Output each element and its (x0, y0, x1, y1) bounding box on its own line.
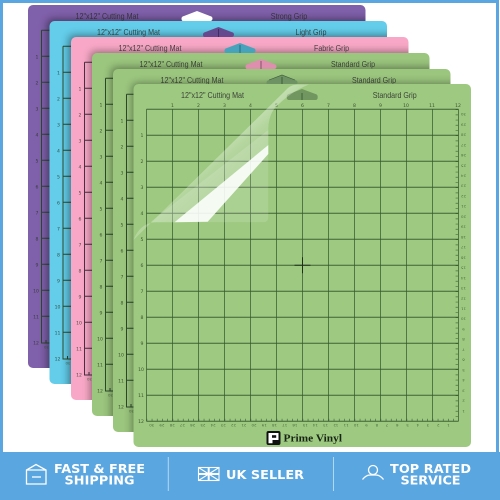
pink ruler numbers: 7 (79, 242, 82, 248)
right cm numbers: 29 (461, 122, 466, 127)
pink ruler numbers: 10 (76, 320, 82, 326)
left inch numbers: 6 (141, 263, 144, 269)
mat: purple strong grip (28, 5, 366, 368)
film white reflection (174, 145, 268, 222)
bottom cm numbers: 10 (353, 423, 359, 428)
mat: green standard grip front (134, 84, 471, 447)
UK seller text: UK SELLER (226, 468, 304, 483)
right cm numbers: 11 (461, 306, 466, 312)
pink ruler numbers: 8 (79, 268, 82, 274)
green middle ruler numbers: 2 (121, 144, 124, 150)
green back ruler numbers: 10 (97, 336, 103, 342)
blue ruler numbers: 6 (57, 200, 60, 206)
bottom cm numbers: 23 (220, 423, 226, 428)
pink ruler numbers: 6 (79, 216, 82, 222)
green back ruler numbers: 2 (100, 128, 103, 134)
bottom cm numbers: 27 (179, 423, 185, 428)
purple ruler numbers: 6 (36, 184, 39, 190)
right cm numbers: 27 (461, 143, 466, 148)
purple ruler numbers (33, 54, 49, 350)
blue ruler numbers: 30 (65, 361, 70, 366)
peeled film flap (134, 84, 309, 240)
front grip label: Standard Grip (373, 90, 417, 100)
purple ruler numbers: 2 (36, 80, 39, 86)
top inch numbers: 10 (403, 103, 409, 109)
purple ruler numbers: 12 (33, 340, 39, 346)
footer band (0, 452, 500, 500)
icon: shipping box (26, 464, 46, 484)
green middle ruler numbers: 4 (121, 196, 124, 202)
green middle ruler numbers: 11 (118, 378, 124, 384)
blue mat handle hole (203, 27, 234, 37)
purple ruler numbers: 9 (36, 262, 39, 268)
left inch numbers: 11 (138, 393, 144, 399)
fast and free shipping text: SHIPPING (64, 474, 134, 488)
top inch numbers: 9 (379, 103, 382, 109)
front handle hole (287, 89, 318, 100)
blue ruler numbers: 5 (57, 174, 60, 180)
left inch numbers: 9 (141, 341, 144, 347)
purple heading: 12"x12" Cutting Mat (76, 11, 139, 21)
bottom cm numbers: 13 (323, 423, 328, 428)
top inch numbers: 7 (327, 103, 330, 109)
pink ruler numbers: 4 (79, 164, 82, 170)
pink ruler numbers: 2 (79, 112, 82, 118)
top inch numbers: 11 (429, 103, 435, 109)
green back ruler numbers: 4 (100, 180, 103, 186)
purple ruler numbers: 8 (36, 236, 39, 242)
blue ruler numbers (55, 70, 70, 366)
bottom cm numbers: 16 (292, 423, 297, 428)
bottom cm numbers: 2 (436, 423, 439, 428)
blue ruler numbers: 12 (55, 356, 60, 362)
right cm numbers: 28 (461, 133, 466, 138)
pink ruler numbers (76, 86, 92, 382)
green middle ruler numbers: 6 (121, 248, 124, 254)
pink ruler numbers: 5 (79, 190, 82, 196)
top inch numbers: 5 (275, 103, 278, 109)
right cm numbers: 26 (461, 153, 466, 158)
icon: person (362, 466, 384, 480)
green back ruler numbers: 30 (108, 393, 113, 398)
front heading: 12"x12" Cutting Mat (181, 90, 245, 100)
blue grip label: Light Grip (296, 27, 327, 37)
bottom cm numbers: 28 (169, 423, 175, 428)
right cm numbers: 14 (461, 276, 466, 281)
green middle ruler numbers: 8 (121, 300, 124, 306)
right cm numbers: 19 (461, 225, 466, 230)
bottom cm numbers: 3 (426, 423, 429, 428)
bottom cm numbers: 8 (375, 423, 378, 428)
brand logo (266, 431, 342, 445)
right cm numbers: 7 (462, 347, 465, 352)
top rated service text: SERVICE (400, 474, 460, 488)
pink ruler numbers: 9 (79, 294, 82, 300)
logo mark (266, 431, 280, 445)
pink grip label: Fabric Grip (314, 43, 349, 53)
blue heading: 12"x12" Cutting Mat (97, 27, 161, 37)
green back ruler numbers: 5 (100, 206, 103, 212)
bottom cm numbers: 17 (282, 423, 287, 428)
fast and free shipping text (54, 462, 145, 488)
bottom cm numbers: 12 (333, 423, 338, 428)
green middle ruler numbers: 5 (121, 222, 124, 228)
bottom cm numbers: 22 (231, 423, 236, 428)
purple ruler numbers: 7 (36, 210, 39, 216)
green back ruler numbers: 1 (100, 102, 103, 108)
green back ruler numbers: 3 (100, 154, 103, 160)
cutting grid (146, 109, 458, 421)
dividers (168, 457, 334, 491)
blue ruler numbers: 2 (57, 96, 60, 102)
top inch numbers: 6 (301, 103, 304, 109)
mat: green standard grip middle (113, 69, 450, 432)
top inch numbers: 1 (171, 103, 174, 109)
bottom cm numbers: 1 (447, 423, 450, 428)
left inch numbers: 5 (141, 237, 144, 243)
green back ruler numbers: 6 (100, 232, 103, 238)
purple ruler numbers: 3 (36, 106, 39, 112)
right cm numbers: 15 (461, 266, 466, 271)
blue ruler numbers: 3 (57, 122, 60, 128)
pink mat handle hole (224, 43, 256, 53)
right cm numbers: 24 (461, 174, 466, 178)
bottom cm numbers: 6 (395, 423, 398, 428)
left inch numbers: 8 (141, 315, 144, 321)
right cm numbers: 22 (461, 194, 466, 199)
green back ruler numbers: 12 (97, 388, 103, 394)
right cm numbers: 30 (461, 112, 466, 117)
bottom cm numbers: 14 (312, 423, 318, 428)
purple ruler numbers: 5 (36, 158, 39, 164)
right cm numbers: 25 (461, 163, 466, 168)
pink ruler numbers: 1 (79, 86, 82, 92)
bottom cm numbers: 21 (241, 423, 246, 428)
purple ruler numbers: 4 (36, 132, 39, 138)
right cm numbers: 13 (461, 286, 466, 291)
bottom cm numbers: 18 (272, 423, 277, 428)
top inch numbers: 12 (455, 103, 461, 109)
blue ruler numbers: 8 (57, 252, 60, 258)
bottom cm numbers: 20 (251, 423, 256, 428)
green middle ruler numbers: 30 (129, 409, 134, 414)
left inch numbers: 4 (141, 211, 144, 217)
bottom cm numbers: 4 (416, 423, 419, 428)
green middle ruler numbers: 9 (121, 326, 124, 332)
right cm numbers: 16 (461, 255, 466, 260)
pink ruler numbers: 11 (76, 346, 82, 352)
bottom cm numbers: 25 (200, 423, 205, 428)
left inch numbers: 1 (141, 133, 144, 139)
right cm numbers: 18 (461, 235, 466, 240)
bottom cm numbers: 24 (210, 423, 216, 428)
top inch numbers: 8 (353, 103, 356, 109)
blue ruler numbers: 7 (57, 226, 60, 232)
green middle handle hole (266, 75, 298, 85)
logo wordmark: Prime Vinyl (284, 434, 342, 444)
green middle ruler numbers: 1 (121, 118, 124, 124)
right cm numbers: 21 (461, 204, 466, 209)
blue ruler numbers: 9 (57, 278, 60, 284)
purple ruler numbers: 11 (33, 314, 39, 320)
bottom cm numbers: 26 (190, 423, 195, 428)
left inch numbers: 12 (138, 419, 144, 425)
green middle ruler numbers: 10 (118, 352, 124, 358)
green middle grip label: Standard Grip (352, 75, 396, 85)
center crosshair (294, 257, 310, 273)
mat: blue light grip (50, 21, 387, 384)
green middle heading: 12"x12" Cutting Mat (160, 75, 224, 85)
right cm numbers: 1 (462, 409, 465, 414)
purple ruler numbers: 1 (36, 54, 39, 60)
right cm numbers: 17 (461, 245, 466, 250)
bottom cm numbers (149, 423, 450, 428)
left inch numbers: 2 (141, 159, 144, 165)
bottom cm numbers: 5 (406, 423, 409, 428)
bottom cm numbers: 30 (149, 423, 154, 428)
blue ruler numbers: 4 (57, 148, 60, 154)
green back ruler numbers: 11 (97, 362, 103, 368)
green back heading: 12"x12" Cutting Mat (140, 59, 203, 69)
left inch numbers: 3 (141, 185, 144, 191)
right cm numbers: 9 (462, 327, 465, 332)
pink ruler numbers: 3 (79, 138, 82, 144)
top inch numbers: 4 (249, 103, 252, 109)
right cm numbers: 2 (462, 399, 465, 404)
purple ruler numbers: 10 (33, 288, 39, 294)
green back ruler numbers: 7 (100, 258, 103, 264)
top rated service text (390, 462, 471, 488)
top rated service text: TOP RATED (390, 462, 471, 477)
right cm numbers: 23 (461, 184, 466, 189)
left inch numbers: 7 (141, 289, 144, 295)
bottom cm numbers: 19 (261, 423, 267, 428)
right cm numbers: 5 (462, 368, 465, 373)
fast and free shipping text: FAST & FREE (54, 462, 145, 477)
green middle ruler numbers (118, 118, 134, 414)
right cm numbers: 6 (462, 358, 465, 363)
left inch numbers (138, 133, 144, 425)
right cm numbers: 12 (461, 296, 466, 301)
green back ruler numbers: 8 (100, 284, 103, 290)
mat: green standard grip back (92, 53, 430, 416)
bottom cm numbers: 7 (385, 423, 388, 428)
bottom cm numbers: 29 (159, 423, 164, 428)
blue ruler numbers: 1 (57, 70, 60, 76)
purple grip label: Strong Grip (271, 11, 308, 21)
icon: UK flag (198, 468, 219, 480)
purple mat handle hole (182, 11, 212, 21)
pink ruler numbers: 12 (76, 372, 82, 378)
right cm numbers: 20 (461, 214, 466, 219)
right cm numbers: 10 (461, 317, 466, 322)
pink ruler numbers: 30 (87, 377, 92, 382)
cm ruler ticks (146, 109, 458, 421)
transparent film lower sheet (150, 130, 268, 222)
green middle ruler numbers: 7 (121, 274, 124, 280)
right cm numbers (461, 112, 466, 414)
purple ruler numbers: 30 (44, 345, 49, 350)
green back ruler numbers (97, 102, 113, 398)
green middle ruler numbers: 3 (121, 170, 124, 176)
green middle ruler numbers: 12 (118, 404, 124, 410)
top inch numbers: 3 (223, 103, 226, 109)
bottom cm numbers: 11 (343, 423, 349, 428)
green back ruler numbers: 9 (100, 310, 103, 316)
right cm numbers: 8 (462, 337, 465, 342)
pink heading: 12"x12" Cutting Mat (118, 43, 182, 53)
blue ruler numbers: 11 (55, 330, 60, 336)
right cm numbers: 3 (462, 388, 465, 393)
top inch numbers (171, 103, 461, 109)
green back handle hole (246, 59, 276, 69)
bottom cm numbers: 15 (302, 423, 308, 428)
left inch numbers: 10 (138, 367, 144, 373)
mat: pink fabric grip (71, 37, 408, 400)
green back grip label: Standard Grip (331, 59, 375, 69)
top inch numbers: 2 (197, 103, 200, 109)
right cm numbers: 4 (462, 378, 465, 383)
bottom cm numbers: 9 (365, 423, 368, 428)
blue ruler numbers: 10 (55, 304, 60, 310)
